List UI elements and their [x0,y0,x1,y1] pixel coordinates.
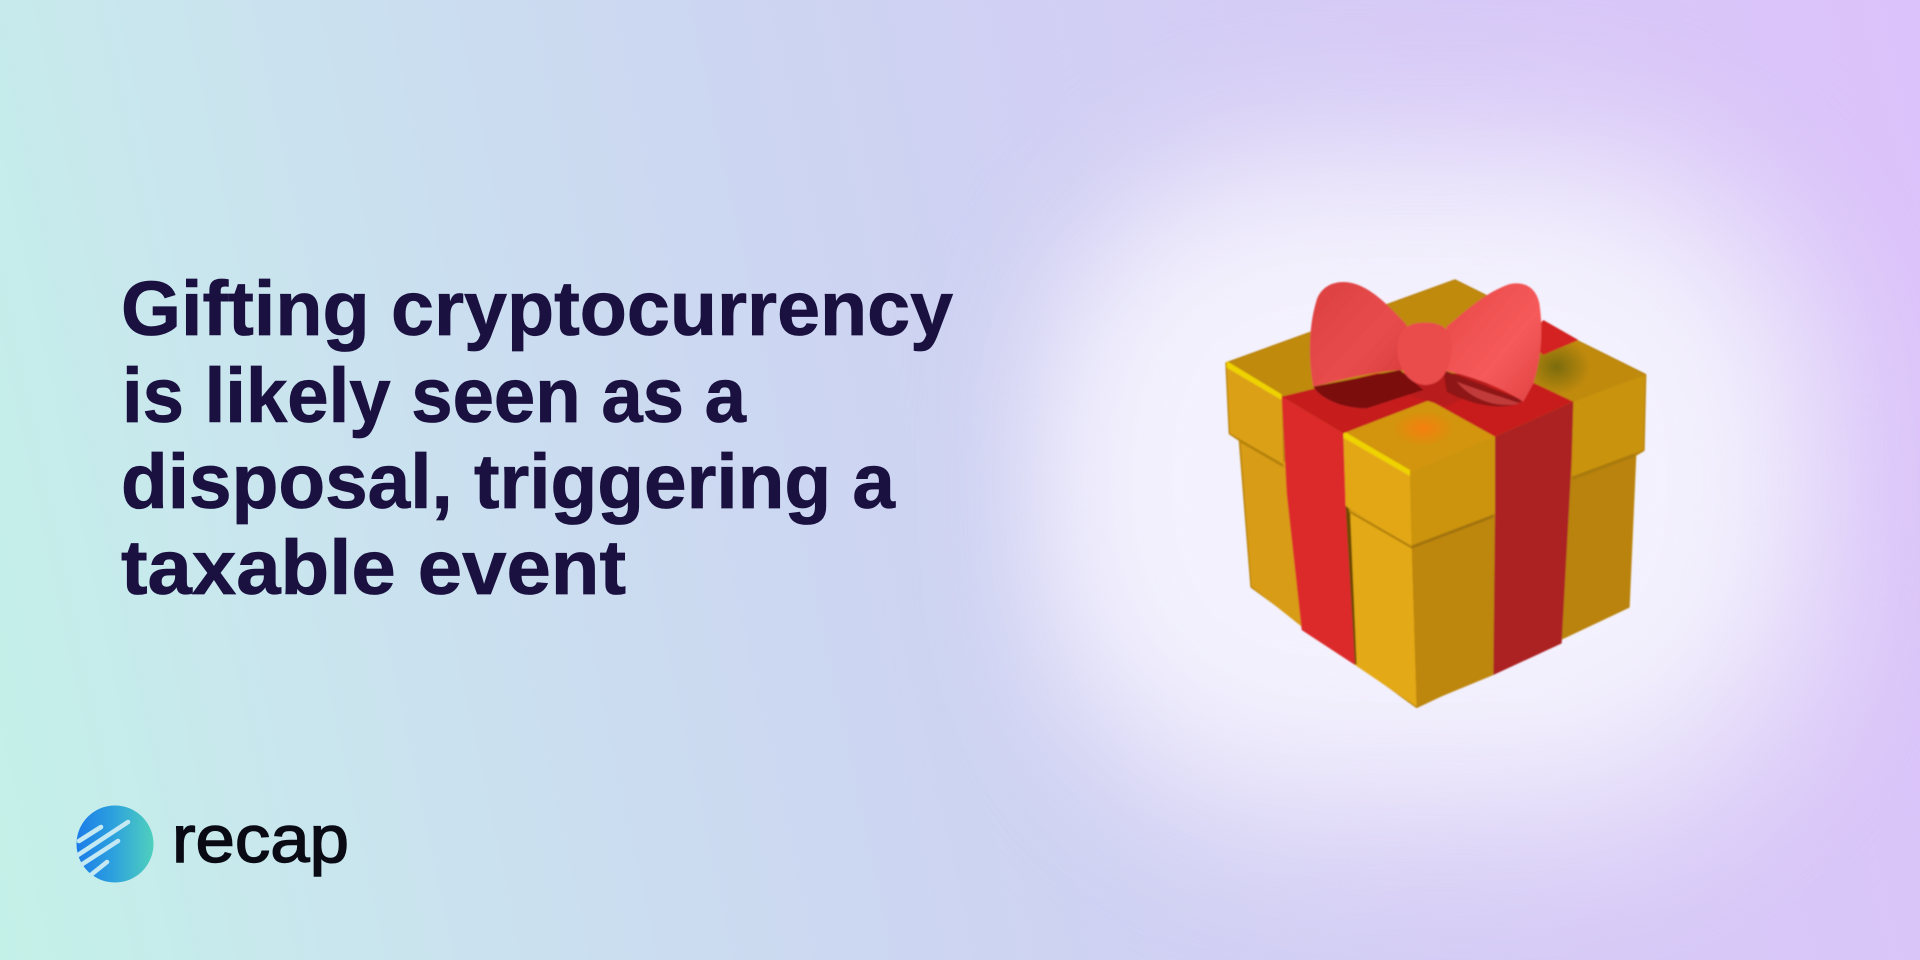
title: Gifting cryptocurrency [121,266,953,352]
outer background glow [1020,110,1860,870]
title [121,266,953,611]
title: disposal, triggering a [121,439,896,525]
logo mark [76,806,154,882]
logo: recap [76,802,349,882]
ribbon [1282,320,1578,675]
box lower body [1240,437,1635,707]
title: is likely seen as a [122,353,747,439]
logo wordmark: recap [172,802,349,877]
box silhouette [1227,281,1645,707]
bow [1310,282,1541,408]
title: taxable event [121,525,626,611]
icon: gift box [1227,281,1645,707]
box lid [1227,281,1645,545]
background glow behind gift [1070,200,1770,760]
